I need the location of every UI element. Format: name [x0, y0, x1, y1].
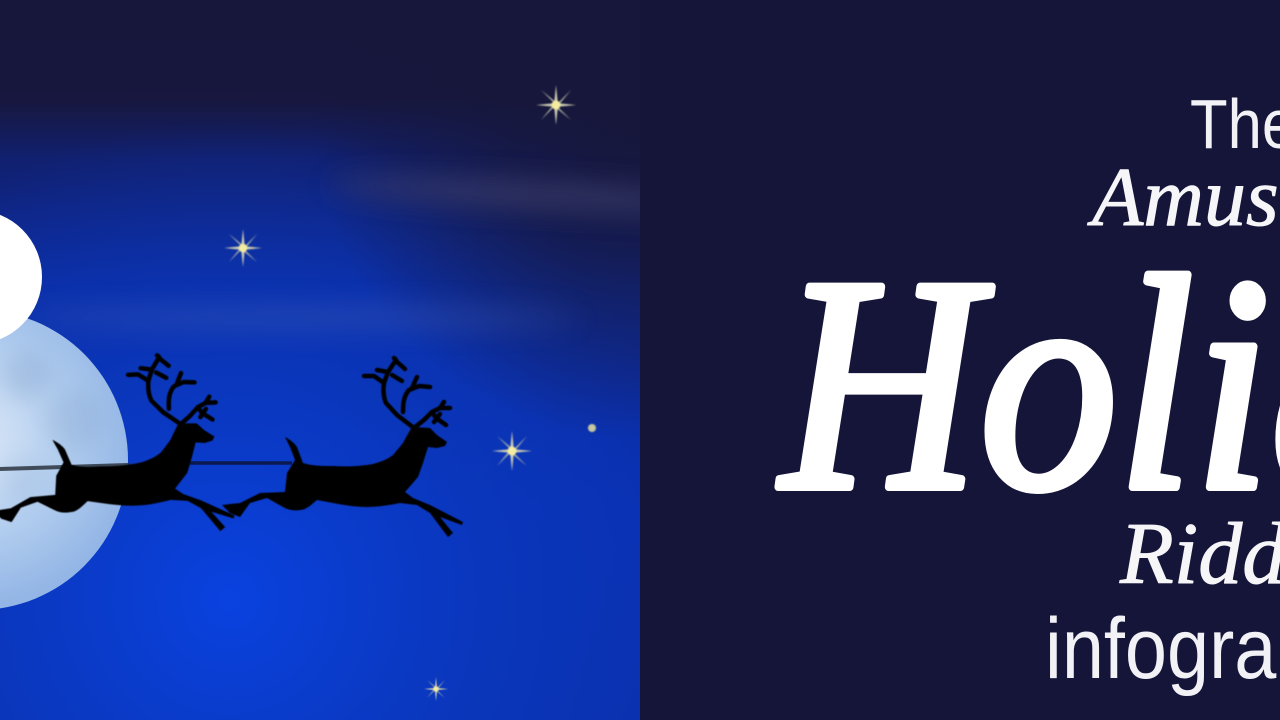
icon: star bottom: [424, 677, 448, 701]
icon: reins between reindeer: [0, 463, 292, 469]
title text: [777, 84, 1280, 697]
icon: white full moon: [0, 210, 42, 344]
icon: star right: [492, 431, 532, 471]
icon: star top: [536, 85, 576, 125]
icon: star left: [224, 229, 262, 267]
icon: large pale moon: [0, 310, 128, 610]
icon: reindeer silhouettes: [0, 352, 463, 543]
icon: small star: [588, 424, 596, 432]
panel: night sky scene: [0, 85, 640, 720]
